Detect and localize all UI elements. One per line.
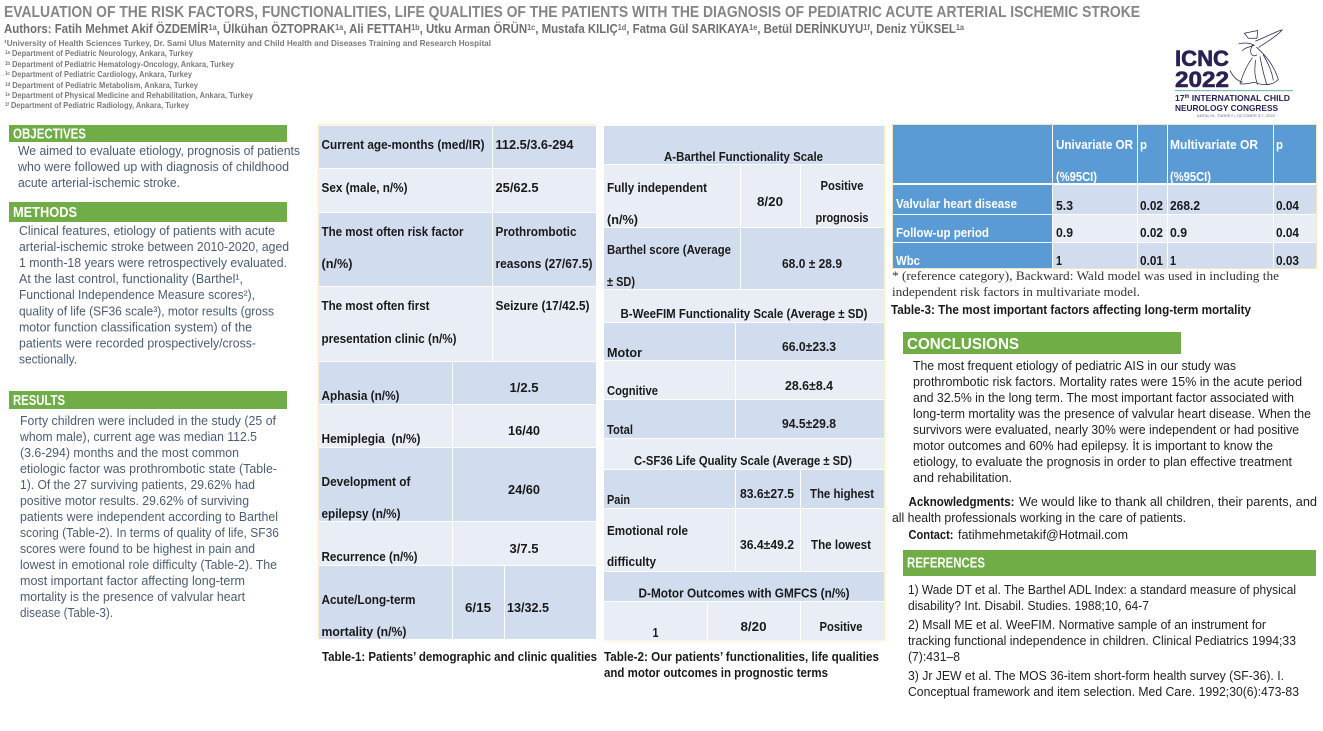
authors: , Betül DERİNKUYU [757, 21, 863, 36]
table 1: demographic and clinic qualities: 24/60 [508, 482, 540, 497]
authors: 1c [527, 23, 536, 32]
table 2: functionalities, life qualities, motor outcomes: The lowest [811, 537, 872, 552]
caption: table 2 [604, 649, 879, 680]
authors: , Mustafa KILIÇ [535, 22, 618, 36]
table 2: functionalities, life qualities, motor outcomes: 28.6±8.4 [785, 378, 834, 393]
table 1: demographic and clinic qualities: 13/32.5 [507, 600, 549, 615]
affiliations: 1f [5, 102, 9, 108]
table 1: demographic and clinic qualities: (n/%) [322, 256, 352, 271]
table 2: functionalities, life qualities, motor outcomes: Barthel score (Average [607, 242, 731, 257]
table 3: factors affecting long-term mortality: 0.04 [1276, 198, 1300, 213]
authors: , Fatma Gül SARIKAYA [626, 22, 749, 36]
text: results body: etiologic factor was prothrombotic state (Table- [20, 461, 277, 476]
text: results body [19, 413, 279, 620]
text: results body: scoring (Table-2). In terms of quality of life, SF36 [20, 525, 279, 540]
table 3: factors affecting long-term mortality: 0.02 [1140, 198, 1163, 213]
panel: results [9, 391, 287, 620]
table 3: factors affecting long-term mortality: 1 [1056, 253, 1062, 268]
text: objectives body [17, 143, 300, 190]
text: methods body: 1 month-18 years were retrospectively evaluated. [19, 255, 287, 270]
heading: objectives: OBJECTIVES [13, 126, 86, 142]
table 2: functionalities, life qualities, motor outcomes: D-Motor Outcomes with GMFCS (n/%) [638, 586, 850, 600]
table 1: demographic and clinic qualities: Current age-months (med/IR) [322, 137, 484, 152]
table 3: factors affecting long-term mortality: Follow-up period [896, 225, 989, 240]
authors: 1a [209, 23, 217, 32]
affiliations: 1b [5, 61, 10, 67]
logo: ICNC 2022: 2022 [1175, 67, 1229, 92]
text: results body: whom male), current age was median 112.5 [19, 429, 257, 444]
table 2: functionalities, life qualities, motor outcomes: Motor [607, 345, 642, 360]
authors: 1e [749, 23, 758, 32]
table 1: demographic and clinic qualities: Sex (male, n/%) [322, 180, 408, 195]
table 2: functionalities, life qualities, motor outcomes: ± SD) [607, 274, 635, 289]
authors: , Ülkühan ÖZTOPRAK [217, 21, 335, 36]
text: conclusions body: long-term mortality was the presence of valvular heart disease. When the [913, 406, 1311, 421]
footnote: table 3: independent risk factors in multivariate model. [892, 285, 1140, 299]
table 3: factors affecting long-term mortality: 268.2 [1170, 198, 1200, 213]
table 2: functionalities, life qualities, motor outcomes [604, 125, 886, 642]
text: acknowledgments [892, 494, 1317, 525]
table 1: demographic and clinic qualities [318, 124, 597, 640]
text: contact: Contact: [908, 527, 954, 542]
table 1: demographic and clinic qualities: Recurrence (n/%) [322, 549, 418, 564]
text: results body: scores were found to be highest in pain and [20, 541, 255, 556]
table 2: functionalities, life qualities, motor outcomes: 83.6±27.5 [740, 486, 794, 501]
authors: Authors: Fatih Mehmet Akif ÖZDEMİR [4, 22, 228, 36]
text: results body: 1). Of the 27 surviving patients, 29.62% had [20, 477, 255, 492]
table 3: factors affecting long-term mortality: p [1276, 137, 1283, 152]
table 2: functionalities, life qualities, motor outcomes: 94.5±29.8 [782, 416, 836, 431]
table 2: functionalities, life qualities, motor outcomes: Positive [820, 178, 864, 193]
affiliations: Department of Pediatric Neurology, Ankara, Turkey [10, 48, 193, 58]
table 1: demographic and clinic qualities: reasons (27/67.5) [496, 256, 592, 271]
text: objectives body: who were followed up with diagnosis of childhood [17, 159, 289, 174]
text: results body: positive motor results. 29.62% of surviving [20, 493, 249, 508]
text: methods body: quality of life (SF36 scale³), motor results (gross [19, 304, 274, 318]
authors: 1b [411, 23, 420, 32]
logo: ICNC 2022: ANTALYA, TURKEY | OCTOBER 3-7, 2022 [1197, 113, 1276, 118]
text: methods body: Clinical features, etiology of patients with acute [19, 223, 275, 238]
table 2: functionalities, life qualities, motor outcomes: Positive [820, 619, 862, 634]
affiliations: Department of Pediatric Hematology-Oncology, Ankara, Turkey [10, 59, 234, 69]
text: reference list: disability? Int. Disabil. Studies. 1988;10, 64-7 [908, 598, 1149, 613]
affiliations: ¹University of Health Sciences Turkey, Dr. Sami Ulus Maternity and Child Health and Diseases Training and Research Hospital [4, 38, 491, 48]
table 3: factors affecting long-term mortality: 0.04 [1276, 225, 1300, 240]
panel: methods [9, 202, 289, 366]
table 2: functionalities, life qualities, motor outcomes: prognosis [816, 210, 868, 225]
authors: 1d [618, 23, 626, 32]
table 2: functionalities, life qualities, motor outcomes: A-Barthel Functionality Scale [664, 149, 823, 164]
text: results body: patients were independent according to Barthel [20, 509, 278, 524]
title: EVALUATION OF THE RISK FACTORS, FUNCTIONALITIES, LIFE QUALITIES OF THE PATIENTS WITH THE DIAGNOSIS OF PEDIATRIC ACUTE ARTERIAL ISCHEMIC STROKE [4, 4, 1140, 21]
table 2: functionalities, life qualities, motor outcomes: Pain [607, 492, 630, 507]
affiliations: Department of Pediatric Metabolism, Ankara, Turkey [10, 80, 198, 90]
table 2: functionalities, life qualities, motor outcomes: 68.0 ± 28.9 [782, 256, 842, 271]
table 1: demographic and clinic qualities: 112.5/3.6-294 [496, 137, 574, 152]
heading: conclusions [903, 332, 1181, 354]
table 3: factors affecting long-term mortality: Valvular heart disease [896, 196, 1017, 211]
text: acknowledgments: We would like to thank all children, their parents, and [1019, 494, 1317, 509]
table 1: demographic and clinic qualities: Prothrombotic [496, 224, 576, 239]
text: objectives body: We aimed to evaluate etiology, prognosis of patients [18, 143, 300, 158]
text: methods body: arterial-ischemic stroke between 2010-2020, aged [19, 239, 289, 254]
table 1: demographic and clinic qualities: Hemiplegia (n/%) [322, 431, 420, 446]
logo: ICNC 2022: INTERNATIONAL CHILD [1189, 93, 1290, 103]
table 1: demographic and clinic qualities: presentation clinic (n/%) [322, 331, 456, 346]
table 2: functionalities, life qualities, motor outcomes: Cognitive [607, 383, 658, 398]
table 1: demographic and clinic qualities: 6/15 [465, 600, 491, 615]
header block [4, 4, 1140, 110]
table 1: demographic and clinic qualities: 1/2.5 [510, 380, 538, 395]
heading: references: REFERENCES [907, 556, 985, 572]
table 3: factors affecting long-term mortality: p [1140, 137, 1147, 152]
text: acknowledgments: all health professionals working in the care of patients. [892, 510, 1186, 525]
caption: table 3: Table-3: The most important factors affecting long-term mortality [891, 302, 1252, 317]
table 2: functionalities, life qualities, motor outcomes: 36.4±49.2 [740, 537, 794, 552]
text: methods body: motor function classification system) of the [19, 320, 252, 334]
table 1: demographic and clinic qualities: Development of [322, 474, 411, 489]
table 3: factors affecting long-term mortality: Wbc [896, 253, 920, 268]
icon: whirling dervish [1230, 30, 1282, 85]
footnote: table 3: * (reference category), Backward: Wald model was used in including the [892, 269, 1279, 283]
table 2: functionalities, life qualities, motor outcomes: 8/20 [757, 194, 783, 209]
text: results body: (3.6-294) months and the most common [20, 445, 239, 460]
text: reference list [908, 582, 1299, 699]
text: conclusions body: prothrombotic risk factors. Mortality rates were 15% in the acute period [913, 374, 1302, 389]
text: reference list: Conceptual framework and item selection. Med Care. 1992;30(6):473-83 [908, 684, 1299, 699]
table 2: functionalities, life qualities, motor outcomes: difficulty [607, 554, 657, 569]
heading: methods [9, 202, 287, 222]
table 2: functionalities, life qualities, motor outcomes: (n/%) [607, 212, 638, 227]
caption: table 2: and motor outcomes in prognostic terms [604, 665, 828, 680]
table 1: demographic and clinic qualities: 25/62.5 [496, 180, 538, 195]
table 3: factors affecting long-term mortality: 0.03 [1276, 253, 1299, 268]
table 3: factors affecting long-term mortality: Multivariate OR [1170, 137, 1259, 152]
table 3: factors affecting long-term mortality [892, 124, 1317, 269]
affiliations: Department of Pediatric Cardiology, Ankara, Turkey [10, 69, 192, 79]
panel: conclusions [903, 332, 1311, 485]
logo: ICNC 2022: NEUROLOGY CONGRESS [1175, 103, 1278, 113]
logo: ICNC 2022: 17 [1175, 93, 1184, 103]
text: results body: lowest in emotional role difficulty (Table-2). The [20, 557, 277, 572]
panel: references [903, 550, 1316, 699]
table 3: factors affecting long-term mortality: (%95CI) [1170, 169, 1211, 184]
text: reference list: 3) Jr JEW et al. The MOS 36-item short-form health survey (SF-36). I. [908, 668, 1284, 683]
text: methods body: sectionally. [19, 352, 77, 366]
text: objectives body: acute arterial-ischemic stroke. [18, 175, 180, 190]
table 3: factors affecting long-term mortality: Univariate OR [1056, 137, 1134, 152]
authors: , Utku Arman ÖRÜN [420, 21, 527, 36]
table 3: factors affecting long-term mortality: (%95CI) [1056, 169, 1097, 184]
affiliations: 1d [5, 82, 10, 88]
authors: 1f [863, 23, 870, 32]
table 1: demographic and clinic qualities: Acute/Long-term [322, 592, 416, 607]
text: methods body: Functional Independence Measure scores²), [19, 287, 255, 302]
text: reference list: tracking functional independence in children. Clinical Pediatrics 1994;33 [908, 633, 1296, 648]
text: conclusions body: etiology, to evaluate the prognosis in order to plan effective treatment [913, 454, 1292, 469]
table 2: functionalities, life qualities, motor outcomes: The highest [810, 486, 875, 501]
affiliations: 1c [5, 71, 10, 77]
table 3: factors affecting long-term mortality: 0.02 [1140, 225, 1163, 240]
table 1: demographic and clinic qualities: mortality (n/%) [322, 624, 406, 639]
text: results body: disease (Table-3). [20, 605, 113, 620]
table 3: factors affecting long-term mortality: 1 [1170, 253, 1176, 268]
heading: conclusions: CONCLUSIONS [907, 336, 1019, 353]
text: methods body: At the last control, functionality (Barthel¹, [19, 271, 243, 286]
affiliations: 1e [5, 92, 10, 98]
text: conclusions body: survivors were evaluated, nearly 30% were independent or had positive [913, 422, 1299, 437]
table 3: factors affecting long-term mortality: 5.3 [1056, 198, 1073, 213]
logo: ICNC 2022: th [1185, 94, 1189, 100]
text: reference list: 2) Msall ME et al. WeeFIM. Normative sample of an instrument for [908, 617, 1267, 632]
authors: , Ali FETTAH [343, 22, 411, 36]
text: methods body [19, 223, 289, 366]
table 2: functionalities, life qualities, motor outcomes: Fully independent [607, 180, 708, 195]
caption: table 1: Table-1: Patients’ demographic and clinic qualities [322, 649, 597, 664]
text: acknowledgments: Acknowledgments: [908, 494, 1014, 509]
text: reference list: (7):431–8 [908, 649, 960, 664]
table 3: factors affecting long-term mortality: 0.9 [1170, 225, 1187, 240]
table 2: functionalities, life qualities, motor outcomes: 66.0±23.3 [782, 339, 836, 354]
table 2: functionalities, life qualities, motor outcomes: Total [607, 422, 633, 437]
table 1: demographic and clinic qualities: 16/40 [508, 423, 540, 438]
heading: objectives [9, 125, 287, 142]
table 3: factors affecting long-term mortality: 0.01 [1140, 253, 1163, 268]
footnote: table 3 [892, 269, 1279, 299]
authors: 1a [956, 23, 964, 32]
text: conclusions body: and rehabilitation. [913, 470, 1012, 485]
table 1: demographic and clinic qualities: The most often first [322, 298, 430, 313]
heading: references [903, 550, 1316, 576]
table 1: demographic and clinic qualities: 3/7.5 [510, 541, 538, 556]
table 2: functionalities, life qualities, motor outcomes: 8/20 [740, 619, 766, 634]
affiliations: Department of Physical Medicine and Rehabilitation, Ankara, Turkey [10, 90, 253, 100]
affiliations: Department of Pediatric Radiology, Ankara, Turkey [9, 100, 189, 110]
table 1: demographic and clinic qualities: epilepsy (n/%) [322, 506, 400, 521]
logo: ICNC 2022 [1175, 30, 1293, 118]
table 3: factors affecting long-term mortality: 0.9 [1056, 225, 1073, 240]
text: results body: mortality is the presence of valvular heart [20, 589, 245, 604]
authors: , Deniz YÜKSEL [870, 21, 956, 36]
text: contact: fatihmehmetakif@Hotmail.com [958, 527, 1128, 542]
logo: ICNC 2022: ICNC [1175, 46, 1229, 71]
table 1: demographic and clinic qualities: The most often risk factor [322, 224, 464, 239]
text: reference list: 1) Wade DT et al. The Barthel ADL Index: a standard measure of physical [908, 582, 1296, 597]
heading: methods: METHODS [13, 205, 77, 221]
text: conclusions body: motor outcomes and 60% had epilepsy. İt is important to know the [913, 438, 1273, 453]
table 2: functionalities, life qualities, motor outcomes: Emotional role [607, 523, 688, 538]
affiliations: 1a [5, 50, 10, 56]
table 1: demographic and clinic qualities: Aphasia (n/%) [322, 388, 400, 403]
table 2: functionalities, life qualities, motor outcomes: 1 [652, 625, 658, 640]
panel: objectives [9, 125, 300, 190]
table 1: demographic and clinic qualities: Seizure (17/42.5) [496, 298, 590, 313]
caption: table 2: Table-2: Our patients’ functionalities, life qualities [604, 649, 879, 664]
text: results body: Forty children were included in the study (25 of [20, 413, 276, 428]
text: methods body: patients were recorded prospectively/cross- [19, 336, 256, 350]
heading: results: RESULTS [13, 393, 65, 409]
affiliations [4, 38, 491, 110]
table 2: functionalities, life qualities, motor outcomes: B-WeeFIM Functionality Scale (Average ± SD) [620, 306, 868, 321]
heading: results [9, 391, 287, 409]
table 2: functionalities, life qualities, motor outcomes: C-SF36 Life Quality Scale (Average ± SD) [634, 453, 852, 468]
authors: 1a [335, 23, 344, 32]
text: conclusions body [913, 358, 1311, 485]
text: conclusions body: The most frequent etiology of pediatric AIS in our study was [913, 358, 1236, 373]
text: conclusions body: and 32.5% in the long term. The most important factor associated with [913, 390, 1294, 405]
text: results body: most important factor affecting long-term [20, 573, 245, 588]
